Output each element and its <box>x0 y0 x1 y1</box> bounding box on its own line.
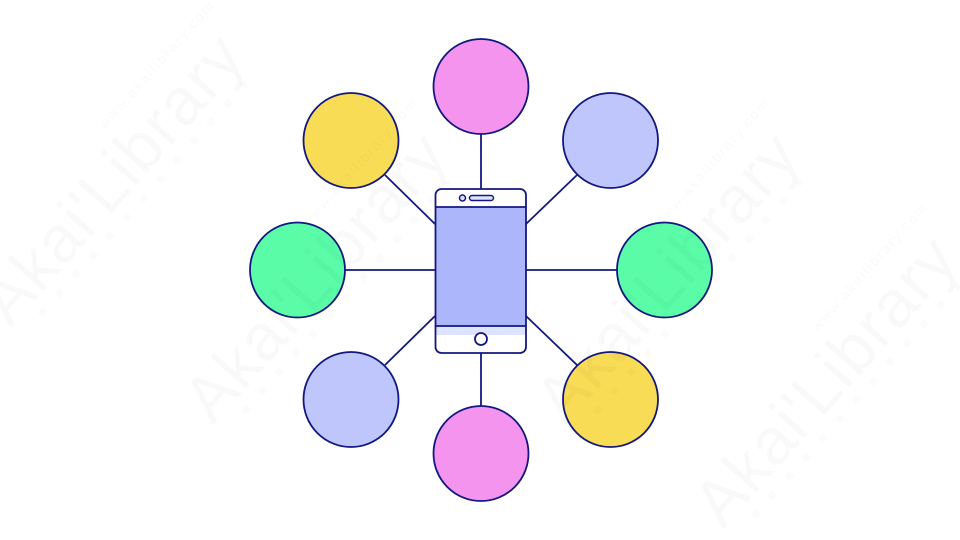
watermark: Akai Library repeated: www.akailibrary.com <box>94 0 216 133</box>
watermark: Akai Library repeated: Akai'Library <box>168 118 461 435</box>
circle: top pink <box>434 39 528 134</box>
watermark: Akai Library repeated: Akai'Library <box>520 118 813 435</box>
connector lines <box>345 134 617 406</box>
watermark: Akai Library repeated: www.akailibrary.com <box>649 96 771 231</box>
circle: lower right yellow <box>563 352 658 447</box>
circle: lower left lavender <box>304 352 398 447</box>
icon: smartphone <box>436 189 526 353</box>
watermark: Akai Library repeated: www.akailibrary.com <box>297 96 419 231</box>
circle: upper left yellow <box>304 93 398 188</box>
circle: bottom pink <box>434 406 528 501</box>
watermark: Akai Library repeated: www.akailibrary.com <box>807 200 929 335</box>
circle: upper right lavender <box>563 93 658 188</box>
circle: left green <box>250 222 345 318</box>
circle: right green <box>617 222 712 318</box>
